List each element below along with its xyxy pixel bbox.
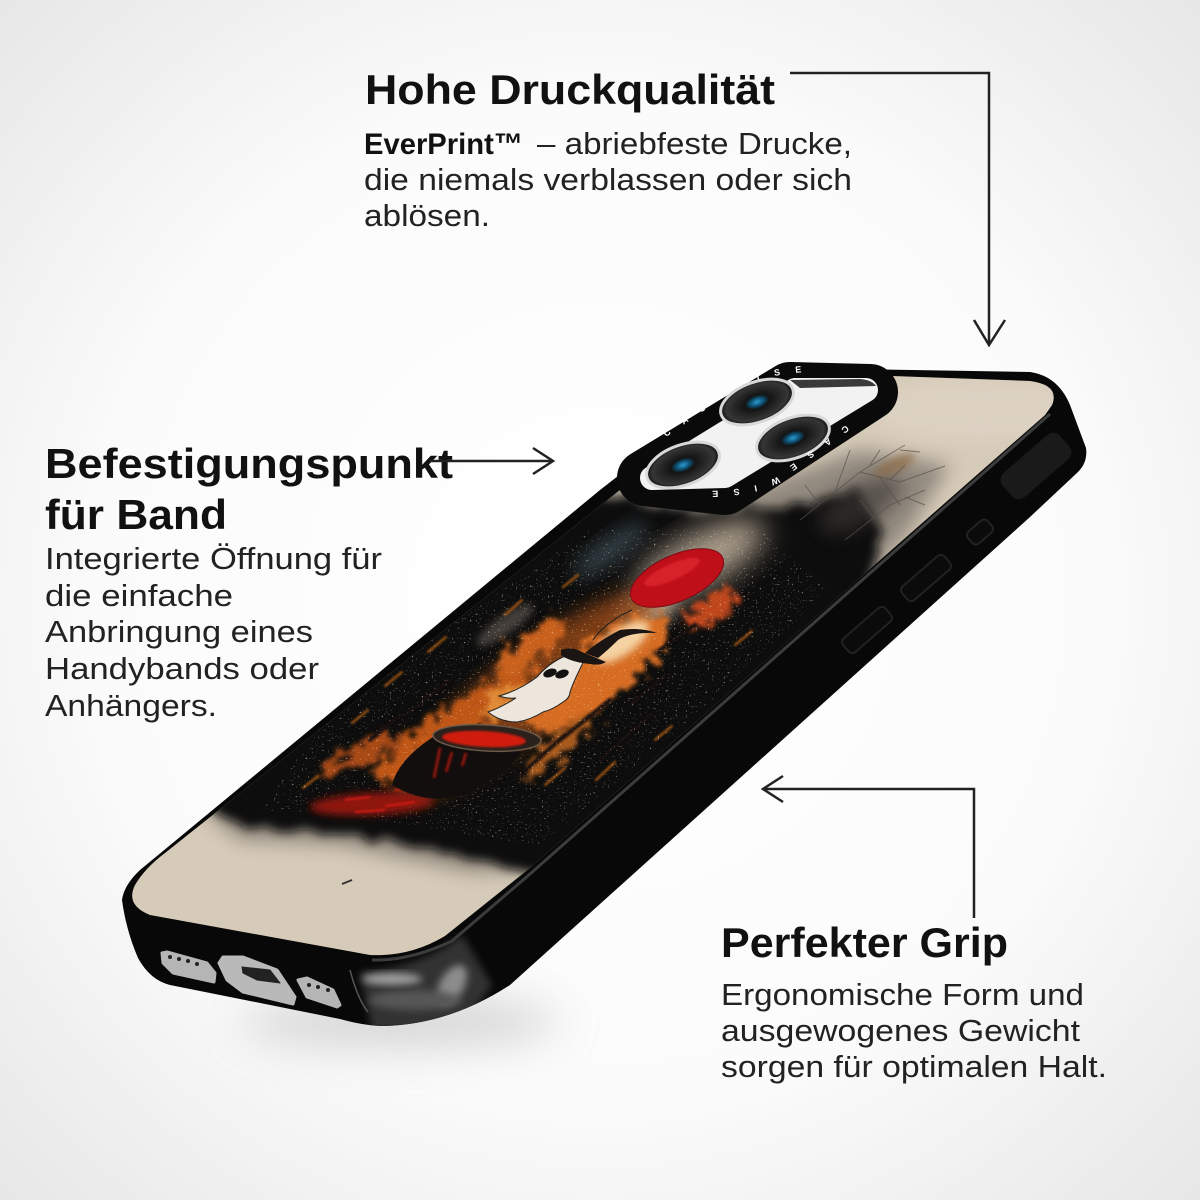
ghost <box>488 629 657 722</box>
text: grip description: sorgen für optimalen Halt. <box>721 1049 1107 1084</box>
heading: grip: Perfekter Grip <box>721 919 1008 966</box>
text: strap point description: Integrierte Öffnung für <box>45 541 382 576</box>
speaker holes <box>168 955 330 992</box>
volume up <box>899 553 953 603</box>
painted orange zones <box>312 583 742 794</box>
brand text upper: CASEWISE <box>664 366 802 436</box>
printed back <box>132 376 1054 956</box>
phone shadow <box>240 996 560 1048</box>
phone case <box>122 362 1086 1026</box>
heading: strap point: für Band <box>45 491 227 538</box>
cauldron <box>392 722 542 799</box>
amber tree glow <box>874 449 918 477</box>
cauldron drip <box>434 748 466 778</box>
teal haze <box>567 515 653 585</box>
case body <box>122 368 1086 1026</box>
port opening <box>242 967 280 983</box>
smoke at right <box>817 468 909 538</box>
cauldron pot <box>392 737 522 799</box>
camera top shade <box>790 379 876 388</box>
soft orange underglow <box>384 580 667 808</box>
bottom ports <box>162 952 340 1007</box>
ghost body <box>488 656 586 722</box>
dust specks <box>260 530 826 844</box>
block: strap point <box>45 440 453 723</box>
red glow on ground <box>310 790 434 818</box>
dark flecks over orange <box>370 625 695 775</box>
heading: strap point: Befestigungspunkt <box>45 440 453 487</box>
side buttons <box>840 429 1075 655</box>
cauldron liquid <box>442 729 526 749</box>
balloon shine <box>641 552 703 592</box>
balloon <box>593 537 732 640</box>
side rail highlight <box>372 414 1050 960</box>
text: print quality description: – abriebfeste Drucke, <box>537 126 852 161</box>
heading: print quality: Hohe Druckqualität <box>365 66 775 113</box>
text: strap point description: die einfache <box>45 578 233 613</box>
text: grip description <box>721 977 1107 1084</box>
brand text lower: CASEWISE <box>712 426 848 497</box>
camera lens 3 <box>640 433 726 497</box>
bare tree <box>618 444 946 540</box>
cream glow near string <box>612 588 688 630</box>
cream glow <box>624 503 776 617</box>
right speaker <box>298 978 340 1007</box>
arrow: print quality <box>790 73 1005 345</box>
block: grip <box>721 919 1107 1084</box>
ghost eyes <box>542 667 570 680</box>
grey haze left <box>474 601 536 649</box>
red strokes on ground <box>345 786 420 812</box>
strap point <box>997 429 1075 503</box>
text: print quality description: EverPrint™ <box>364 128 523 161</box>
charging port <box>219 957 295 1004</box>
text: strap point description: Anhängers. <box>45 688 217 723</box>
beige print ground <box>132 376 1054 956</box>
witch hat <box>561 629 657 665</box>
text: strap point description <box>45 541 382 723</box>
left speaker <box>162 952 215 982</box>
block: print quality <box>364 66 852 233</box>
camera bump <box>617 362 898 515</box>
text: strap point description: Anbringung eines <box>45 614 313 649</box>
text: strap point description: Handybands oder <box>45 651 319 686</box>
camera lens 1 <box>714 370 800 434</box>
bright glow <box>590 616 654 668</box>
arrow: strap point <box>430 448 553 474</box>
balloon shape <box>622 537 732 619</box>
arrow: grip <box>763 776 974 918</box>
glossy corner <box>350 935 492 1030</box>
text: print quality description: die niemals verblassen oder sich <box>364 162 852 197</box>
cauldron rim <box>432 722 542 754</box>
orange flecks on dark <box>303 575 752 788</box>
dark painted area <box>205 490 880 880</box>
tiny bird <box>342 880 352 884</box>
light top tone <box>870 380 1090 440</box>
camera frame <box>645 390 870 487</box>
action button <box>965 517 995 547</box>
camera lens 2 <box>750 406 836 470</box>
text: print quality description: ablösen. <box>364 198 490 233</box>
smoke halo <box>205 450 950 872</box>
volume down <box>840 605 894 655</box>
camera window <box>652 390 866 478</box>
heading: strap point <box>45 440 453 538</box>
text: grip description: ausgewogenes Gewicht <box>721 1013 1080 1048</box>
text: grip description: Ergonomische Form und <box>721 977 1084 1012</box>
text: print quality description <box>364 126 852 233</box>
balloon string <box>593 610 632 640</box>
